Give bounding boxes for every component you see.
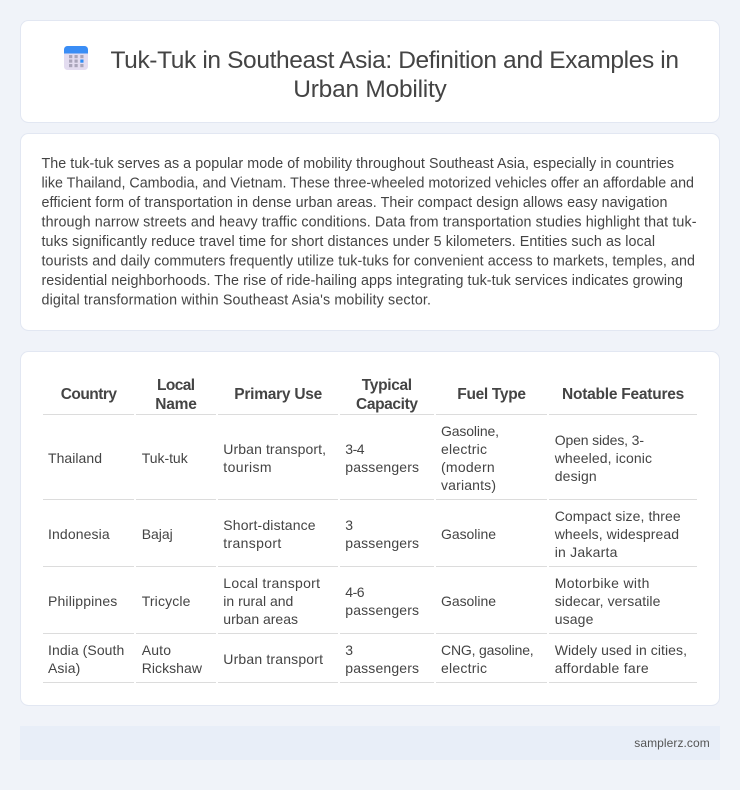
table row: Philippines: urban areas xyxy=(223,611,298,627)
table header row xyxy=(43,377,697,414)
table row: India: electric xyxy=(441,660,487,676)
table row: India xyxy=(43,642,697,682)
table row: Thailand: wheeled, iconic xyxy=(554,450,652,466)
table row: Thailand: (modern xyxy=(441,459,495,475)
table row: Thailand: variants) xyxy=(441,477,496,493)
table header row: Name xyxy=(155,396,197,413)
panel: introduction text xyxy=(20,134,720,330)
footer source text: samplerz.com xyxy=(634,736,710,750)
table row: Philippines: Local transport xyxy=(223,575,320,591)
table row: Thailand: Thailand xyxy=(48,450,102,466)
table row: India: Widely used in cities, xyxy=(555,642,687,658)
table row: Thailand: Gasoline, xyxy=(441,423,499,439)
text block: introduction paragraph: tourists and daily commuters frequently utilize tuk-tuks for convenient access to markets, temples, and xyxy=(42,254,695,270)
table row: Thailand: Tuk-tuk xyxy=(142,450,189,466)
title: Tuk-Tuk in Southeast Asia: Definition and Examples in xyxy=(110,47,679,74)
panel: comparison table xyxy=(20,352,720,706)
title xyxy=(110,47,679,103)
icon: calendar xyxy=(64,46,88,70)
table row: India: Auto xyxy=(142,642,171,658)
table row: Philippines: sidecar, versatile xyxy=(555,593,661,609)
title: Urban Mobility xyxy=(293,76,448,103)
text block: introduction paragraph: tuks significantly reduce travel time for short distances under 5 kilometers. Entities such as local xyxy=(42,234,655,250)
table header row: Fuel Type xyxy=(457,386,526,403)
table row: Indonesia: Bajaj xyxy=(142,526,173,542)
table row: India: affordable fare xyxy=(555,660,649,676)
table row: Thailand: electric xyxy=(441,441,487,457)
table row: India: passengers xyxy=(345,660,419,676)
table row: Thailand: passengers xyxy=(345,459,419,475)
table row: India: CNG, gasoline, xyxy=(441,642,534,658)
table row: India: Asia) xyxy=(48,660,80,676)
table row: Thailand xyxy=(43,423,697,500)
text block: introduction paragraph: through narrow streets and heavy traffic conditions. Data from transportation studies highlight that tuk- xyxy=(42,214,697,230)
table row: India: Urban transport xyxy=(223,651,323,667)
table row: Indonesia xyxy=(43,508,697,566)
text block: introduction paragraph: The tuk-tuk serves as a popular mode of mobility throughout Southeast Asia, especially in countries xyxy=(42,156,674,172)
table row: Indonesia: wheels, widespread xyxy=(554,526,679,542)
table row: Indonesia: 3 xyxy=(345,517,353,533)
table row: Thailand: tourism xyxy=(223,459,272,475)
text block: introduction paragraph: efficient form of transportation in dense urban areas. Their compact design allows easy navigation xyxy=(42,195,668,211)
table row: Thailand: design xyxy=(555,468,597,484)
table row: Philippines: passengers xyxy=(345,602,419,618)
table header row: Local xyxy=(157,377,195,394)
table row: Indonesia: passengers xyxy=(345,535,419,551)
table row: Thailand: 3-4 xyxy=(345,441,365,457)
table row: Indonesia: Indonesia xyxy=(48,526,110,542)
table row: Indonesia: Short-distance xyxy=(223,517,316,533)
table header row: Typical xyxy=(362,377,412,394)
table row: Indonesia: Compact size, three xyxy=(555,508,681,524)
table header row: Notable Features xyxy=(562,386,684,403)
table row: Philippines: Gasoline xyxy=(441,593,496,609)
table row: Indonesia: transport xyxy=(223,535,281,551)
table row: Philippines: Tricycle xyxy=(142,593,191,609)
text block: introduction paragraph xyxy=(42,156,697,308)
table row: Indonesia: in Jakarta xyxy=(555,544,618,560)
table row: India: Rickshaw xyxy=(142,660,203,676)
table row: Philippines: Philippines xyxy=(48,593,117,609)
table row: Philippines xyxy=(43,575,697,634)
table row: Philippines: in rural and xyxy=(223,593,293,609)
table row: Philippines: usage xyxy=(555,611,594,627)
table header row: Country xyxy=(61,386,117,403)
table row: Indonesia: Gasoline xyxy=(441,526,496,542)
text block: introduction paragraph: like Thailand, Cambodia, and Vietnam. These three-wheeled motorized vehicles offer an affordable and xyxy=(42,176,694,192)
table row: India: India (South xyxy=(48,642,124,658)
text block: introduction paragraph: digital transformation within Southeast Asia's mobility sector. xyxy=(42,292,431,308)
footer bar xyxy=(20,726,720,760)
text block: introduction paragraph: residential neighborhoods. The rise of ride-hailing apps integrating tuk-tuk services indicates growing xyxy=(42,273,683,289)
table header row: Primary Use xyxy=(234,386,323,403)
table row: Philippines: 4-6 xyxy=(345,584,365,600)
table header row: Capacity xyxy=(356,396,418,413)
panel: title header xyxy=(20,20,720,122)
table row: Thailand: Urban transport, xyxy=(223,441,326,457)
table row: Thailand: Open sides, 3- xyxy=(555,432,644,448)
table row: Philippines: Motorbike with xyxy=(555,575,649,591)
table row: India: 3 xyxy=(345,642,353,658)
